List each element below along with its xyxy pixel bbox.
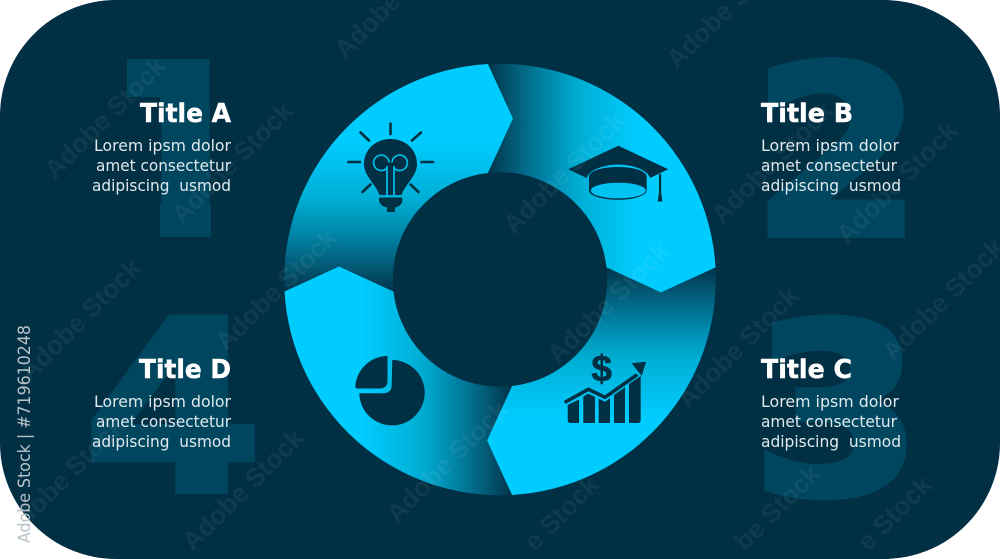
icon: light bulb — [348, 124, 433, 212]
watermark layer: Adobe Stock — [380, 394, 514, 528]
big number 4: 4 — [83, 270, 264, 547]
watermark layer: Adobe Stock — [497, 105, 631, 239]
text block: Title B: adipiscing usmod — [761, 176, 901, 195]
text block: Title B: amet consectetur — [761, 156, 897, 175]
segment A — [284, 64, 513, 292]
text block: Title A: Title A — [140, 99, 231, 129]
icon: graduation cap — [568, 146, 668, 202]
watermark layer: Adobe Stock — [38, 50, 172, 184]
text block: Title D: adipiscing usmod — [92, 432, 231, 451]
icon: growth chart with dollar — [566, 348, 646, 423]
watermark layer: e Stock — [851, 469, 938, 556]
ring diagram — [284, 64, 716, 495]
segment C — [487, 268, 716, 495]
text block: Title B — [761, 99, 901, 195]
text block: Title C — [761, 355, 901, 451]
watermark layer: Adobe Stock — [13, 252, 147, 386]
big number 1: 1 — [110, 11, 249, 290]
watermark layer: e Stock — [518, 469, 605, 556]
text block: Title D: Title D — [139, 355, 231, 385]
watermark layer: Adobe Stock — [165, 95, 299, 229]
watermark layer: Adobe Stock — [209, 222, 343, 356]
segment B — [488, 64, 716, 292]
watermark layer: Adobe Stock — [830, 115, 964, 249]
watermark layer: Adobe Stock — [671, 280, 805, 414]
text block: Title D: Lorem ipsm dolor — [94, 392, 231, 411]
text block: Title C: Title C — [761, 355, 852, 385]
icon: growth chart with dollar: $ — [591, 348, 612, 389]
text block: Title D: amet consectetur — [96, 412, 231, 431]
text block: Title C: adipiscing usmod — [761, 432, 901, 451]
text block: Title B: Title B — [761, 99, 853, 129]
text block: Title C: Lorem ipsm dolor — [761, 392, 899, 411]
watermark layer: Adobe Stock — [541, 235, 675, 369]
text block: Title A — [92, 99, 231, 195]
watermark layer: Adobe Stock — [176, 422, 310, 556]
stock id side label: Adobe Stock | #719610248 — [15, 325, 35, 543]
watermark layer: Adobe Stock — [705, 95, 839, 229]
text block: Title A: amet consectetur — [96, 156, 231, 175]
text block: Title B: Lorem ipsm dolor — [761, 136, 899, 155]
text block: Title A: adipiscing usmod — [92, 176, 231, 195]
text block: Title A: Lorem ipsm dolor — [94, 136, 231, 155]
big number 3: 3 — [751, 274, 923, 551]
text block: Title C: amet consectetur — [761, 412, 897, 431]
segment D — [284, 266, 512, 495]
watermark layer: Adobe Stock — [0, 410, 131, 544]
big number 2: 2 — [751, 17, 923, 291]
icon: pie chart — [355, 356, 425, 425]
big number 1 — [127, 59, 211, 237]
text block: Title D — [92, 355, 231, 451]
watermark layer: be Stock — [728, 458, 826, 556]
